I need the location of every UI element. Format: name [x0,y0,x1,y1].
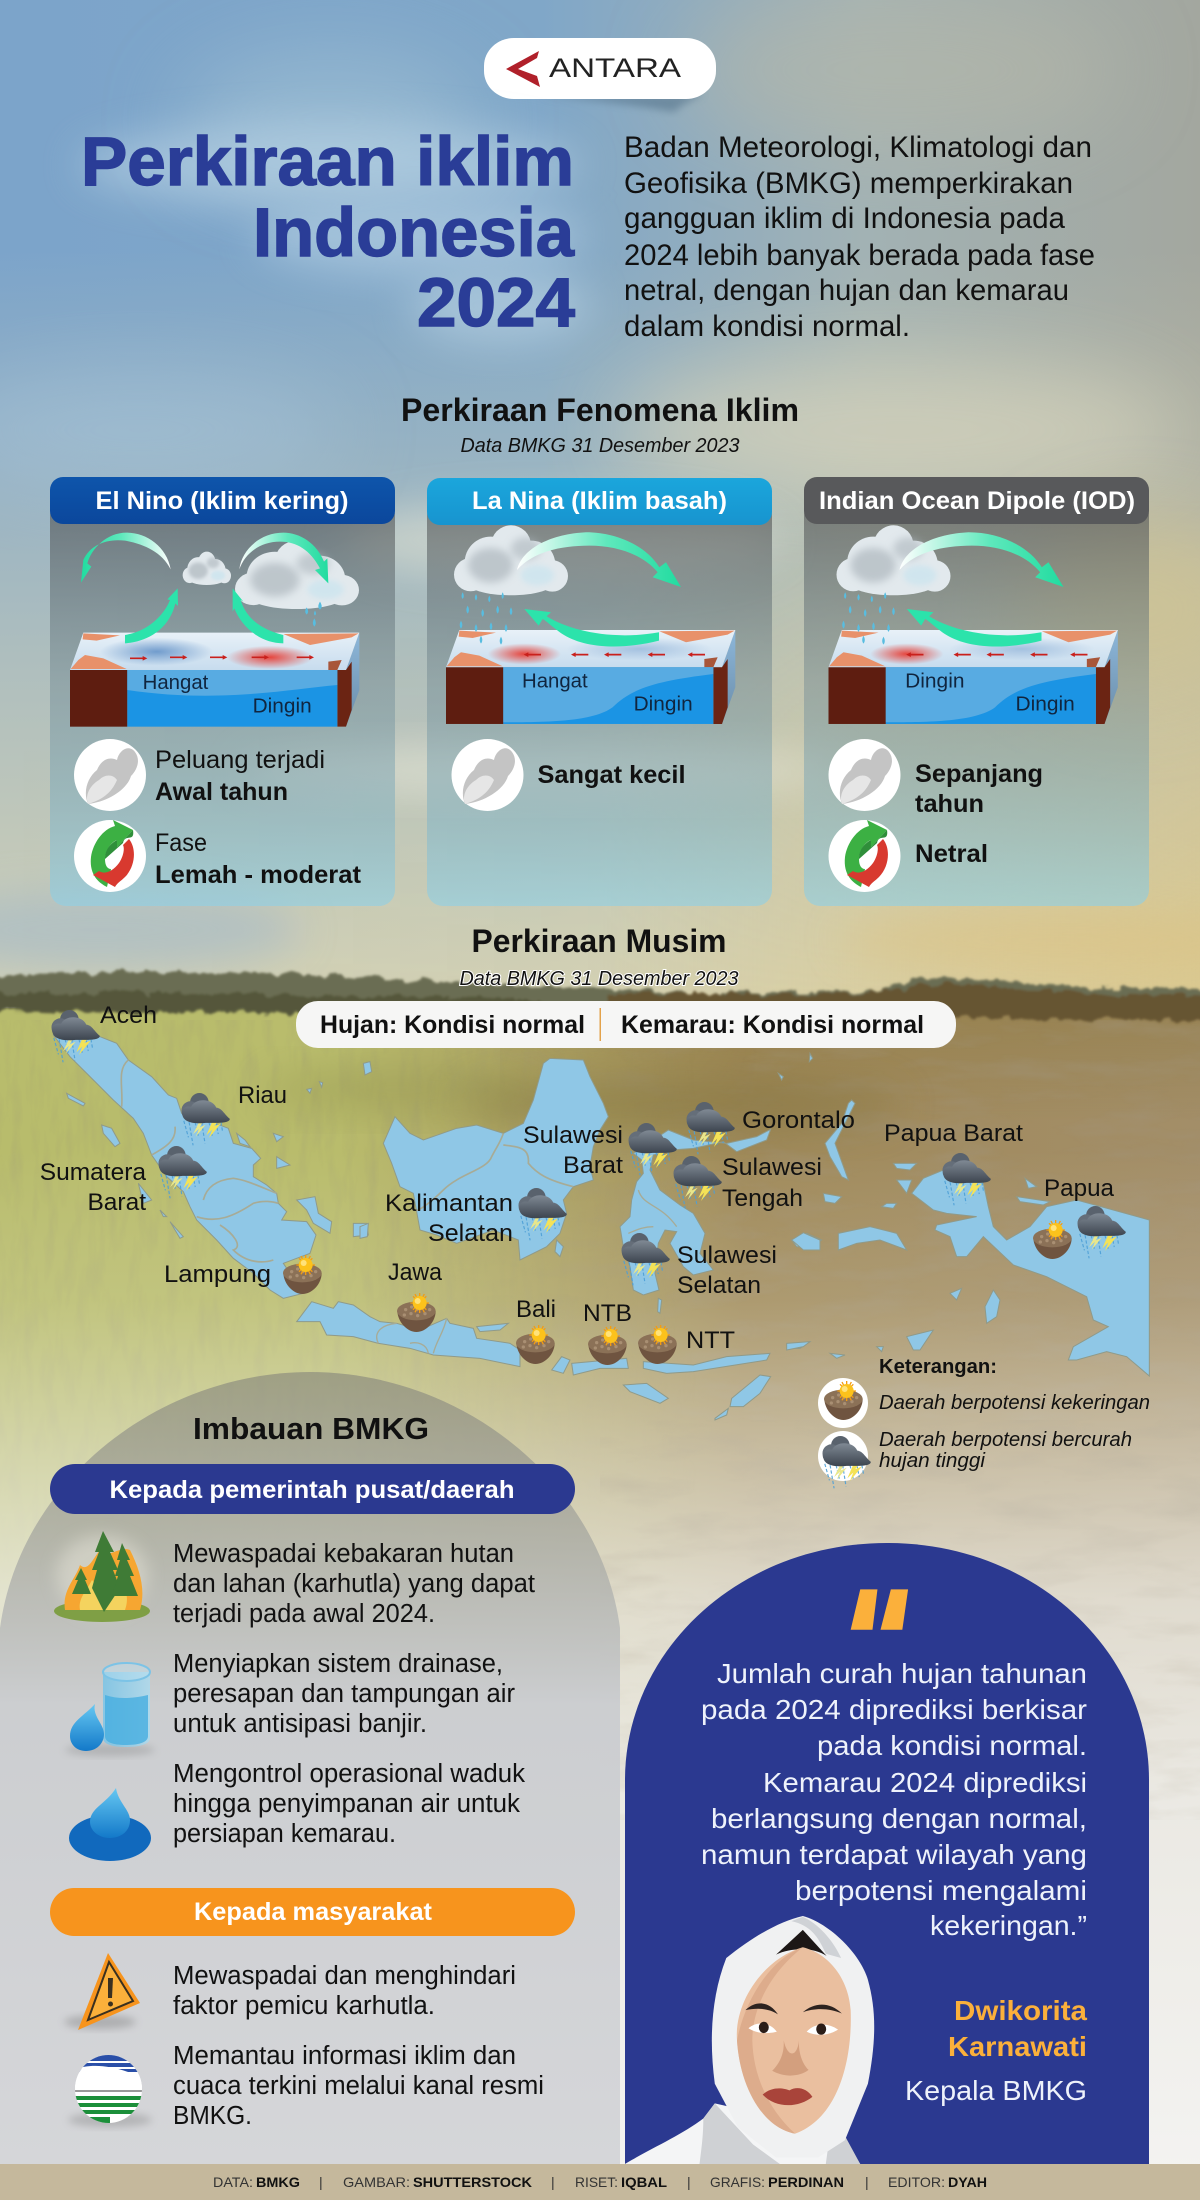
map: Maluku and Papua [787,1100,1149,1376]
text: Menyiapkan sistem drainase: untuk antisipasi banjir. [173,1710,427,1738]
speaker name and role: Dwikorita [954,1995,1088,2026]
pill: season summary: Hujan: Kondisi normal [320,1011,585,1039]
footer credits: | [687,2174,691,2190]
footer credits: GRAFIS: [710,2174,765,2190]
intro paragraph: gangguan iklim di Indonesia pada [624,202,1066,235]
icon: cloud, Peluang terjadi [74,739,146,811]
icon: drought Jawa [397,1293,436,1332]
intro paragraph: netral, dengan hujan dan kemarau [624,274,1069,307]
quote text: pada kondisi normal. [817,1730,1087,1761]
header: La Nina [427,478,772,525]
legend icon: heavy rain [818,1431,871,1488]
footer credits: DATA: [213,2174,253,2190]
map: Kalimantan, Sulawesi and Nusa Tenggara [360,1053,822,1420]
pill: season summary: Kemarau: Kondisi normal [621,1011,924,1039]
label: Sumatera Barat: Sumatera [40,1159,146,1186]
text: Sepanjang tahun [915,760,1043,818]
icon: glass and drop of water [65,1663,155,1756]
label: Kalimantan Selatan [385,1190,513,1247]
text: Mengontrol operasional waduk: persiapan kemarau. [173,1820,396,1848]
legend text: heavy rain: Daerah berpotensi bercurah [879,1428,1132,1451]
diagram: El Nino ocean block [70,533,359,727]
text: Memantau informasi iklim: cuaca terkini melalui kanal resmi [173,2072,544,2100]
label: Sumatera Barat: Barat [87,1189,146,1216]
panel: Indian Ocean Dipole [804,477,1149,906]
text: Sepanjang tahun: tahun [915,790,984,818]
legend text: drought: Daerah berpotensi kekeringan [879,1391,1150,1414]
text: Peluang terjadi: Peluang terjadi [155,746,325,774]
heading: Perkiraan Fenomena Iklim: Data BMKG 31 Desember 2023 [460,435,740,457]
intro paragraph: Geofisika (BMKG) memperkirakan [624,167,1073,200]
footer credits [213,2174,987,2190]
icon: cycle, Fase [74,820,146,892]
header: IOD: Indian Ocean Dipole (IOD) [819,487,1135,515]
text: Mengontrol operasional waduk [173,1760,525,1848]
icon: quotation mark [851,1589,908,1630]
label: Riau: Riau [238,1082,287,1109]
footer credits: RISET: [575,2174,618,2190]
diagram: La Nina ocean block: Hangat [522,670,588,692]
label: Sulawesi Barat [523,1122,623,1179]
text: Mengontrol operasional waduk: hingga penyimpanan air untuk [173,1790,520,1818]
portrait: Dwikorita Karnawati [625,1916,874,2164]
speaker name and role: Kepala BMKG [905,2075,1087,2106]
footer credits: | [551,2174,555,2190]
panel: La Nina [427,478,772,906]
icon: storm Sulawesi Barat [628,1123,677,1175]
intro paragraph: Badan Meteorologi, Klimatologi dan [624,131,1092,164]
icon: BMKG logo [68,2055,152,2127]
label: Sulawesi Tengah: Tengah [722,1185,803,1212]
text: Fase [155,829,362,889]
icon: cloud, Sangat kecil [452,739,524,811]
icon: forest fire [54,1531,150,1622]
icon: cycle, Netral [828,820,900,892]
diagram: La Nina ocean block: Dingin [634,694,693,716]
footer credits: DYAH [948,2174,987,2190]
label: Papua: Papua [1044,1175,1114,1202]
label: Sulawesi Tengah [722,1154,822,1212]
text: Memantau informasi iklim: BMKG. [173,2102,252,2130]
quote text: pada 2024 diprediksi berkisar [701,1694,1087,1725]
speaker name and role [905,1995,1088,2106]
diagram: La Nina ocean block [446,525,735,724]
legend: Keterangan [818,1356,1150,1488]
footer credits: GAMBAR: [343,2174,410,2190]
text: Sepanjang tahun: Sepanjang [915,760,1043,788]
quote text: namun terdapat wilayah yang [701,1839,1087,1870]
label: Bali: Bali [516,1296,556,1323]
diagram: El Nino ocean block: Dingin [253,696,312,718]
text: Menyiapkan sistem drainase [173,1650,515,1738]
quote text: kekeringan.” [930,1910,1087,1941]
label: Sulawesi Selatan: Selatan [677,1272,761,1299]
legend text: heavy rain: hujan tinggi [879,1449,986,1472]
text: Mewaspadai kebakaran hutan: Mewaspadai kebakaran hutan [173,1540,514,1568]
text: Fase: Lemah - moderat [155,861,362,889]
quote text: berpotensi mengalami [795,1875,1087,1906]
diagram: IOD ocean block [828,525,1118,724]
panel: El Nino [50,477,395,906]
label: Sulawesi Barat: Sulawesi [523,1122,623,1149]
label: Aceh: Aceh [100,1002,157,1029]
panel: quote [625,1543,1149,2164]
legend icon: drought [818,1378,868,1428]
footer credits: SHUTTERSTOCK [413,2174,532,2190]
icon: warning triangle [64,1953,140,2030]
text: Mewaspadai kebakaran hutan [173,1540,535,1628]
speaker name and role: Karnawati [948,2031,1087,2062]
label: Gorontalo: Gorontalo [742,1107,855,1134]
icon: storm Papua Barat [942,1153,991,1205]
pill: season summary [296,1001,956,1048]
heading: Perkiraan Fenomena Iklim [401,392,799,457]
text: Memantau informasi iklim [173,2042,544,2130]
text: Mewaspadai kebakaran hutan: terjadi pada awal 2024. [173,1600,435,1628]
label: Sulawesi Barat: Barat [563,1152,623,1179]
text: Mengontrol operasional waduk: Mengontrol operasional waduk [173,1760,525,1788]
label: Sulawesi Tengah: Sulawesi [722,1154,822,1181]
logo: ANTARA [484,38,716,112]
icon: drought NTT [638,1325,677,1364]
intro paragraph [624,131,1095,343]
text: Mewaspadai dan menghindari: Mewaspadai dan menghindari [173,1962,516,1990]
pill: Kepada pemerintah pusat/daerah: Kepada pemerintah pusat/daerah [110,1476,514,1504]
map: Indonesia provinces [53,1028,1149,1420]
icon: storm Sulawesi Tengah [673,1156,722,1208]
text: Fase: Fase [155,829,207,857]
icon: storm Sumatera Barat [158,1146,207,1198]
intro paragraph: 2024 lebih banyak berada pada fase [624,239,1095,272]
pill: Kepada pemerintah pusat/daerah [50,1464,575,1514]
label: Kalimantan Selatan: Selatan [428,1220,513,1247]
text: Netral: Netral [915,840,988,868]
icon: storm Kalimantan Selatan [518,1188,567,1240]
label: Lampung: Lampung [164,1261,271,1288]
text: Memantau informasi iklim: Memantau informasi iklim dan [173,2042,516,2070]
icon: storm Riau [181,1093,230,1145]
map: Sumatra and Java islands [53,1028,520,1367]
icon: storm Sulawesi Selatan [621,1233,670,1285]
heading: Perkiraan Musim: Perkiraan Musim [472,923,726,959]
icon: cloud, Sepanjang tahun [828,739,900,811]
icon: drought Papua [1033,1220,1072,1259]
heading: Perkiraan Musim [460,923,738,990]
text: Peluang terjadi: Awal tahun [155,778,288,806]
icon: storm Aceh [51,1010,100,1062]
label: Papua Barat: Papua Barat [884,1120,1023,1147]
label: Sulawesi Selatan: Sulawesi [677,1242,777,1269]
diagram: El Nino ocean block: Hangat [143,672,209,694]
footer credits: BMKG [256,2174,300,2190]
footer credits: PERDINAN [768,2174,844,2190]
header: La Nina: La Nina (Iklim basah) [472,487,727,515]
icon: reservoir [69,1788,151,1861]
label: Sumatera Barat [40,1159,146,1216]
icon: drought Lampung [283,1255,322,1294]
text: Sangat kecil: Sangat kecil [538,761,686,789]
text: Mewaspadai dan menghindari: faktor pemicu karhutla. [173,1992,435,2020]
diagram: IOD ocean block: Dingin [905,670,964,692]
text: Menyiapkan sistem drainase: peresapan dan tampungan air [173,1680,515,1708]
diagram: IOD ocean block: Dingin [1015,694,1075,716]
label: NTB: NTB [583,1300,632,1327]
quote text: berlangsung dengan normal, [711,1803,1087,1834]
label: Sulawesi Selatan [677,1242,777,1299]
icon: drought NTB [588,1326,627,1365]
legend: Keterangan: Keterangan: [879,1356,997,1378]
header: El Nino [50,477,395,524]
pill: Kepada masyarakat [50,1888,575,1936]
pill: Kepada masyarakat: Kepada masyarakat [194,1898,433,1926]
text: Mewaspadai dan menghindari [173,1962,516,2020]
footer credits: EDITOR: [888,2174,945,2190]
intro paragraph: dalam kondisi normal. [624,310,910,343]
panel: Imbauan BMKG [0,1372,620,2164]
icon: storm Papua [1077,1206,1126,1258]
header: IOD [804,477,1149,524]
quote text: Jumlah curah hujan tahunan [717,1658,1087,1689]
text: Mewaspadai kebakaran hutan: dan lahan (karhutla) yang dapat [173,1570,535,1598]
header: El Nino: El Nino (Iklim kering) [96,487,348,515]
logo: ANTARA: ANTARA [549,53,681,83]
text: Menyiapkan sistem drainase: Menyiapkan sistem drainase, [173,1650,503,1678]
legend text: heavy rain [879,1428,1132,1472]
quote text: Kemarau 2024 diprediksi [763,1767,1087,1798]
label: Kalimantan Selatan: Kalimantan [385,1190,513,1217]
footer credits: IQBAL [621,2174,667,2190]
icon: storm Gorontalo [686,1102,735,1154]
text: Peluang terjadi [155,746,325,806]
heading: Perkiraan Musim: Data BMKG 31 Desember 2023 [460,968,738,990]
title: Perkiraan iklim [81,123,574,200]
title: 2024 [417,264,575,341]
title: Indonesia [253,194,575,271]
heading: Perkiraan Fenomena Iklim: Perkiraan Fenomena Iklim [401,392,799,428]
icon: drought Bali [516,1325,555,1364]
heading: Imbauan BMKG: Imbauan BMKG [193,1411,429,1446]
label: NTT: NTT [686,1327,735,1354]
quote text [701,1658,1087,1941]
footer credits: | [319,2174,323,2190]
footer credits: | [865,2174,869,2190]
title [80,123,590,343]
label: Jawa: Jawa [388,1259,442,1286]
